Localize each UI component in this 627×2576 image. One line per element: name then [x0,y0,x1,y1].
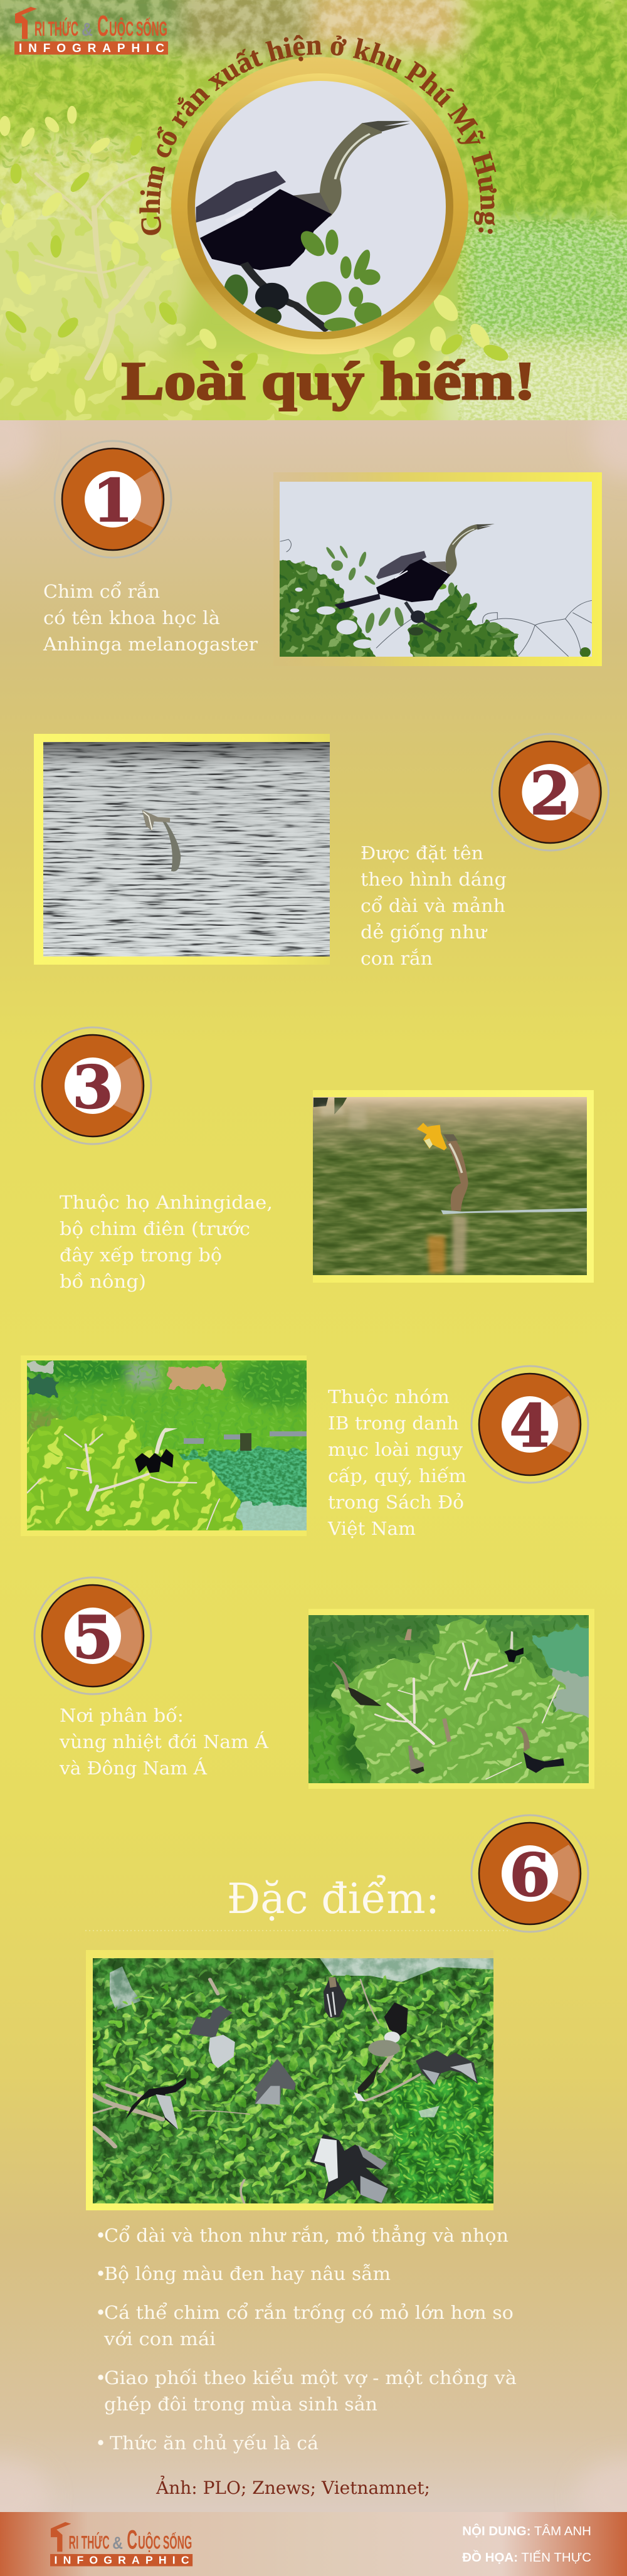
logo: Tri Thức & Cuộc Sống Infographic: INFOGRAPHIC [19,42,164,55]
footer logo: C [127,2525,137,2555]
text: origin of the name: theo hình dáng [361,869,507,890]
logo: Tri Thức & Cuộc Sống Infographic: UỘC [109,18,134,40]
bullet list: • [95,2367,106,2388]
footer logo: RI THỨC [69,2532,110,2553]
number badge 6 [472,1815,588,1932]
number badge 1: 1 [92,467,134,536]
photo 2: bird neck above rippled water [34,734,330,965]
number badge 6: 6 [509,1841,551,1910]
number badge 3: 3 [72,1053,113,1122]
text: family: Thuộc họ Anhingidae, [60,1192,273,1213]
footer logo: UỘC [138,2532,161,2553]
footer logo: INFOGRAPHIC [55,2554,189,2567]
number badge 2 [492,734,608,851]
text: family: bộ chim điên (trước [60,1218,250,1239]
bullet list: Cổ dài và thon như rắn, mỏ thẳng và nhọn [104,2224,508,2246]
number badge 5: 5 [72,1603,113,1672]
bullet list: với con mái [103,2328,216,2350]
text: family [60,1192,273,1292]
bullet list: Bộ lông màu đen hay nâu sẫm [104,2263,391,2284]
photo 4: bird in mangrove and lily pond [21,1355,307,1536]
panel: fact 1 [43,441,602,671]
footer logo [50,2522,192,2567]
number badge 4 [472,1366,588,1483]
credits: NỘI DUNG: TÂM ANH [462,2523,591,2538]
bullet list: • [95,2263,106,2284]
text: distribution: vùng nhiệt đới Nam Á [59,1731,269,1752]
number badge 3 [34,1027,151,1144]
number badge 1 [55,441,171,558]
text: family: đây xếp trong bộ [60,1244,222,1266]
logo: Tri Thức & Cuộc Sống Infographic: RI THỨC [34,18,78,40]
text: IB group [327,1386,466,1539]
text: scientific name: Chim cổ rắn [43,580,160,602]
bullet list: Giao phối theo kiểu một vợ - một chồng và [104,2367,517,2388]
bullet list: • [95,2225,106,2246]
bullet list: ghép đôi trong mùa sinh sản [104,2393,377,2415]
logo: Tri Thức & Cuộc Sống Infographic: & [82,19,93,40]
hero background photo: mangrove and pond [0,0,627,439]
text: origin of the name: cổ dài và mảnh [361,894,505,916]
logo: Tri Thức & Cuộc Sống Infographic: C [97,9,108,42]
panel: hero header [0,0,627,420]
panel: fact 3 [34,1027,594,1292]
footer logo: & [112,2533,123,2553]
text: family: bồ nông) [60,1271,146,1292]
text: IB group: IB trong danh [328,1413,459,1434]
text: scientific name [43,580,258,655]
text: IB group: Việt Nam [327,1518,416,1539]
curved title: Chim cổ rắn xuất hiện ở khu Phú Mỹ Hưng: [139,35,497,235]
number badge 5 [34,1577,151,1694]
text: IB group: Thuộc nhóm [328,1386,450,1407]
text: distribution [59,1705,269,1779]
credits [462,2523,591,2565]
photo 1: bird on treetop [263,472,602,671]
logo: Tri Thức & Cuộc Sống Infographic [14,7,168,55]
photo 5: several birds in a tree [308,1609,594,1789]
text: distribution: và Đông Nam Á [59,1757,208,1779]
text: IB group: trong Sách Đỏ [328,1492,464,1513]
logo: Tri Thức & Cuộc Sống Infographic: SỐNG [136,18,167,40]
text: IB group: cấp, quý, hiếm [328,1465,466,1487]
text: origin of the name: dẻ giống như [361,921,487,943]
credits: ĐỒ HỌA: TIẾN THỰC [462,2550,591,2565]
text: scientific name: Anhinga melanogaster [43,633,258,655]
footer [0,2512,627,2576]
text: origin of the name: con rắn [361,948,433,969]
text: IB group: mục loài nguy [328,1439,463,1460]
bullet list: • [95,2302,106,2323]
panel: fact 2 [34,734,608,969]
bullet list [95,2224,517,2454]
panel: fact 4 [13,1349,588,1543]
number badge 4: 4 [509,1392,551,1461]
panel: fact 6 characteristics [75,1815,588,2498]
text: scientific name: có tên khoa học là [43,607,220,628]
heading: Đặc điểm: Đặc điểm: [227,1875,440,1923]
bullet list: • [95,2432,106,2454]
footer logo: SỐNG [163,2532,192,2553]
text: distribution: Nơi phân bố: [60,1705,184,1726]
circular photo: anhinga with spread wings [188,75,451,339]
photo 6: colony of birds in a tree [86,1950,493,2210]
photo credit: Ảnh: PLO; Znews; Vietnamnet; [155,2476,430,2498]
number badge 2: 2 [530,760,571,829]
gold circular frame [171,57,468,354]
bullet list: Cá thể chim cổ rắn trống có mỏ lớn hơn so [104,2301,514,2323]
text: origin of the name [361,842,507,969]
panel: fact 5 [34,1577,602,1797]
photo 3: bird catching a yellow fish [313,1090,594,1283]
bullet list: Thức ăn chủ yếu là cá [110,2432,319,2454]
text: origin of the name: Được đặt tên [361,842,483,864]
main title: Loài quý hiếm! [122,351,535,411]
